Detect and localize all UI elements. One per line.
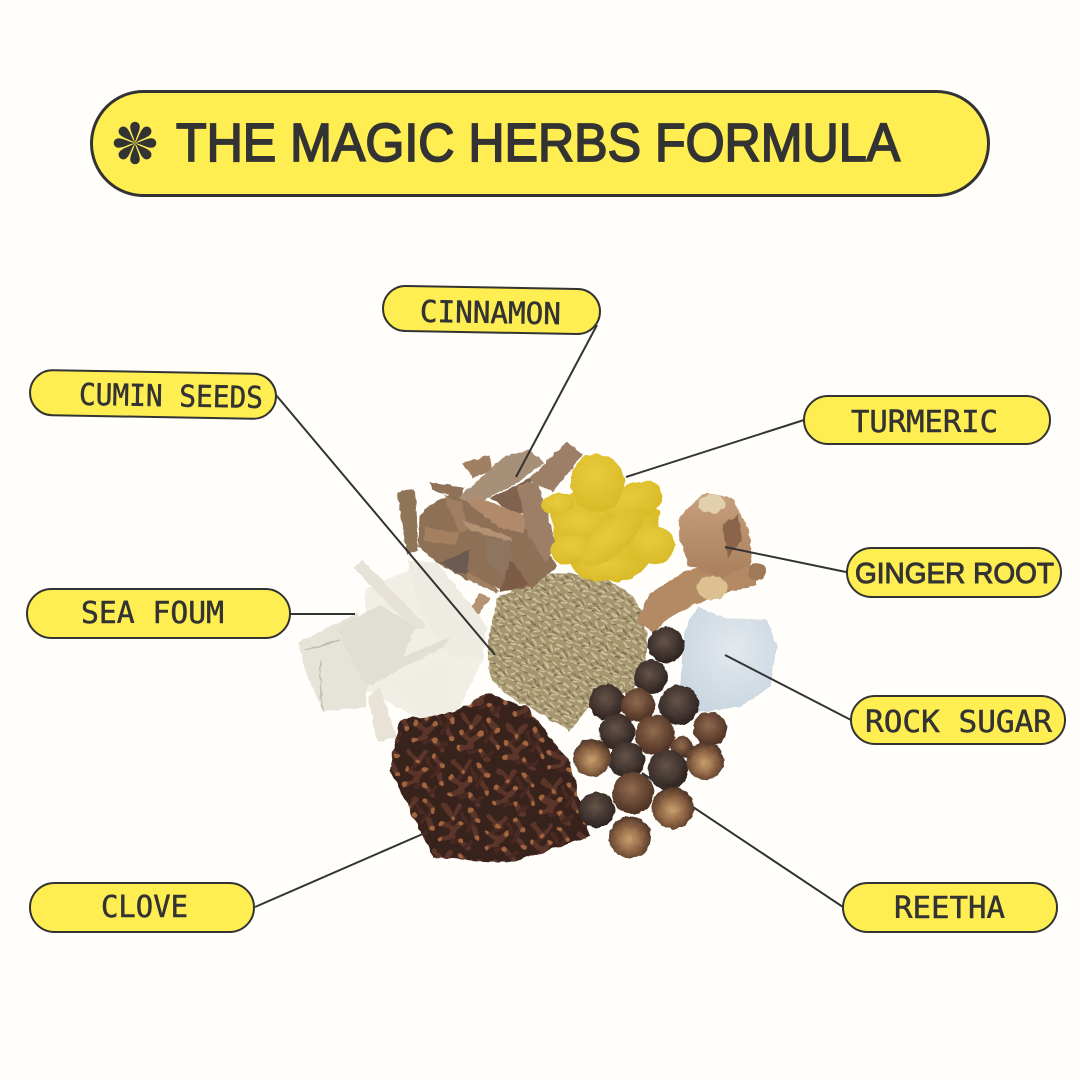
title text: THE MAGIC HERBS FORMULA — [176, 113, 900, 173]
label: clove: CLOVE — [101, 890, 188, 925]
reetha soapnuts — [573, 627, 727, 858]
icon: flower asterisk — [114, 122, 156, 164]
ginger root — [637, 493, 766, 633]
label: ginger root: GINGER ROOT — [855, 558, 1054, 590]
label: cinnamon — [383, 286, 600, 334]
label: clove — [30, 883, 254, 932]
leader lines — [255, 325, 851, 907]
rock sugar — [680, 607, 777, 712]
label: ginger root — [847, 548, 1061, 597]
label: sea foum: SEA FOUM — [81, 596, 224, 631]
title banner — [92, 92, 988, 196]
label: reetha — [843, 883, 1057, 932]
cinnamon bark — [397, 442, 583, 617]
cumin seeds pile — [488, 573, 647, 732]
sea foam — [298, 560, 487, 742]
label: cumin seeds: CUMIN SEEDS — [79, 378, 263, 416]
label: cumin seeds — [30, 370, 276, 419]
label: reetha: REETHA — [894, 891, 1005, 926]
label: turmeric: TURMERIC — [851, 405, 998, 440]
label: sea foum — [27, 589, 290, 638]
photo: herb pile — [298, 442, 777, 863]
soapnut over reetha pointer — [652, 787, 694, 829]
label: rock sugar: ROCK SUGAR — [865, 705, 1053, 740]
label: rock sugar — [851, 696, 1065, 744]
turmeric — [542, 454, 676, 582]
cloves pile — [390, 693, 590, 863]
label: cinnamon: CINNAMON — [420, 295, 561, 332]
label: turmeric — [804, 396, 1050, 444]
